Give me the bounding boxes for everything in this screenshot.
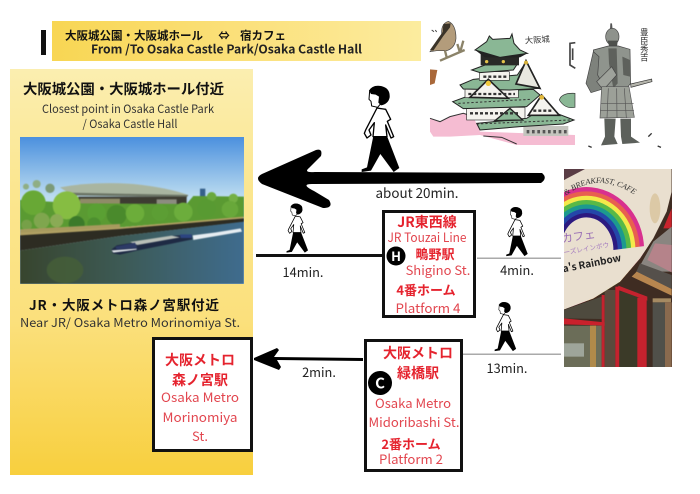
- label: 13min: 13min.: [487, 358, 527, 377]
- station box: Midoribashi: 緑橋駅: [397, 363, 439, 383]
- station box: Morinomiya: St.: [192, 426, 208, 445]
- header accent bar: [41, 30, 46, 55]
- illustration: Osaka Castle: [430, 33, 575, 145]
- station box: Midoribashi: [366, 340, 462, 470]
- label: 14min: 14min.: [283, 262, 323, 281]
- arrow: 2 minutes to Morinomiya: [254, 348, 363, 370]
- icon: walking person 14min: [287, 203, 308, 253]
- station box: Morinomiya: [154, 338, 252, 450]
- panel heading: Morinomiya: JR・大阪メトロ森ノ宮駅付近: [29, 294, 220, 314]
- label: 4min: 4min.: [500, 260, 534, 279]
- panel heading: Osaka Castle Park: 大阪城公園・大阪城ホール付近: [23, 78, 225, 99]
- sign text: katakana: ーズレインボウ: [563, 239, 610, 257]
- sign text: rainbow: a's Rainbow: [561, 249, 623, 275]
- station box: JR Shigino: Platform 4: [396, 298, 460, 317]
- label: 2min: 2min.: [302, 362, 336, 381]
- sign caption: bed and breakfast cafe: & BREAKFAST, CAFE: [564, 178, 637, 195]
- header banner: ⇔: [218, 28, 230, 44]
- station box: Morinomiya: Osaka Metro: [161, 387, 239, 406]
- header banner: From /To Osaka Castle Park/Osaka Castle Hall: [91, 40, 362, 58]
- station box: Morinomiya: Morinomiya: [162, 407, 238, 426]
- icon: line H badge: H: [391, 246, 401, 265]
- header banner: 宿カフェ: [240, 28, 286, 44]
- station box: Morinomiya: 森ノ宮駅: [172, 370, 228, 390]
- sign text: Japanese name: 宿カフェ: [549, 226, 596, 248]
- icon: line C badge: C: [375, 372, 385, 394]
- station box: JR Shigino: 鴫野駅: [415, 244, 455, 263]
- panel subheading: castle hall: / Osaka Castle Hall: [82, 116, 178, 132]
- photo: guesthouse sign with rainbow: [564, 169, 672, 367]
- illustration: bird on branch: [430, 21, 465, 61]
- station box: Morinomiya: 大阪メトロ: [165, 350, 235, 370]
- station box: JR Shigino: JR Touzai Line: [388, 227, 467, 246]
- line: 4 minute walk: [477, 258, 561, 259]
- station box: JR Shigino: 4番ホーム: [396, 280, 456, 299]
- station box: JR Shigino: [384, 212, 474, 317]
- samurai name label: 豊臣秀吉: [638, 28, 650, 63]
- station box: JR Shigino: JR東西線: [397, 212, 457, 232]
- line: 14 minute walk: [256, 254, 383, 257]
- big arrow: about 20 minutes to park: [258, 150, 545, 208]
- station box: Midoribashi: Midoribashi St.: [368, 412, 460, 431]
- icon: large walking person: [362, 86, 399, 172]
- station box: Midoribashi: 大阪メトロ: [383, 343, 453, 363]
- illustration: samurai Toyotomi Hideyoshi: [586, 23, 661, 147]
- line: 13 minute walk: [463, 354, 561, 355]
- icon: walking person 4min: [506, 207, 528, 256]
- header banner: [52, 21, 421, 61]
- station box: Midoribashi: Osaka Metro: [375, 393, 451, 412]
- icon: walking person 13min: [495, 302, 516, 351]
- station box: Midoribashi: 2番ホーム: [381, 434, 441, 453]
- panel: destination: [10, 69, 253, 475]
- panel subheading: near Morinomiya: Near JR/ Osaka Metro Morinomiya St.: [20, 314, 240, 331]
- header banner: 大阪城公園・大阪城ホール: [65, 28, 203, 44]
- station box: Midoribashi: Platform 2: [379, 449, 443, 468]
- photo: Osaka Castle Hall and river boat: [20, 137, 244, 284]
- label: about 20min: about 20min.: [376, 182, 458, 202]
- castle label: 大阪城: [524, 33, 551, 47]
- panel subheading: closest point: Closest point in Osaka Castle Park: [42, 101, 215, 117]
- station box: JR Shigino: Shigino St.: [406, 260, 470, 279]
